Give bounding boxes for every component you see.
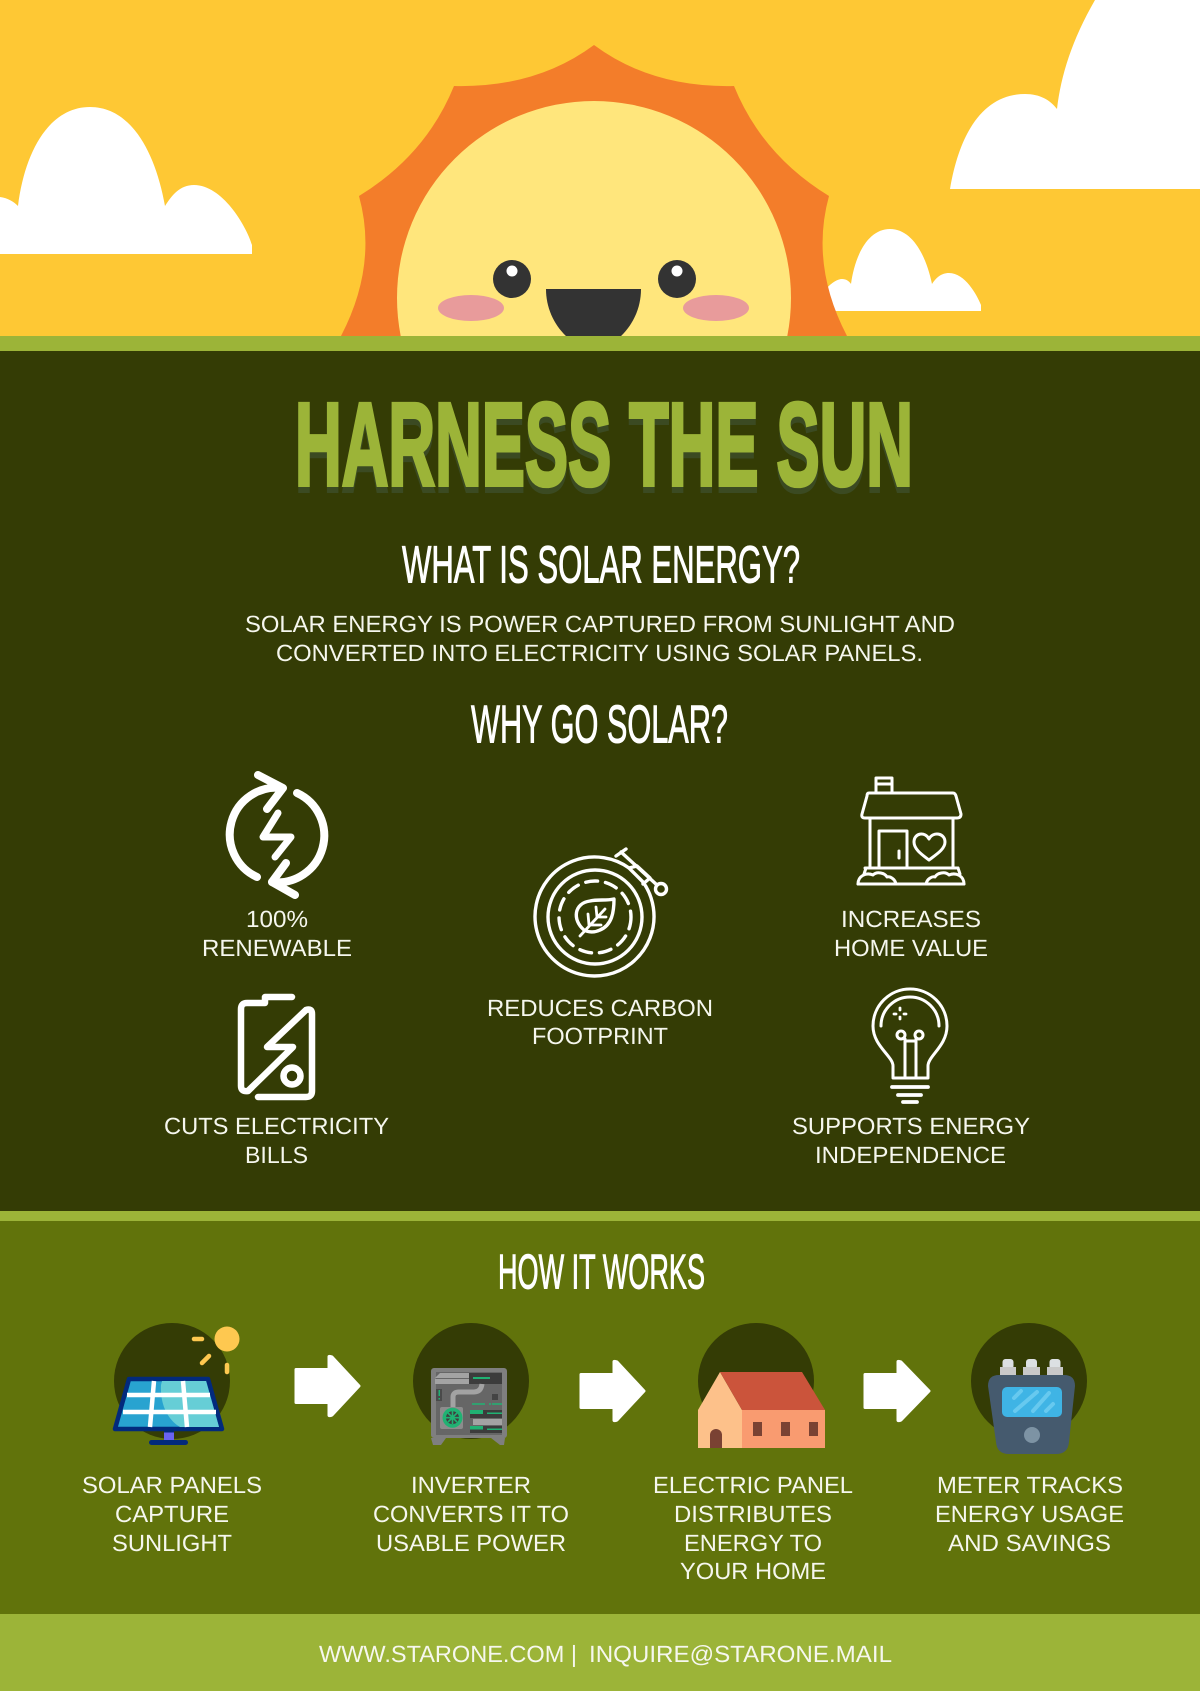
intro text [245,611,955,666]
footer contact line: INQUIRE@STARONE.MAIL [589,1641,892,1667]
label: YOUR HOME [680,1558,826,1584]
label: ELECTRIC PANEL [653,1472,853,1498]
label: CAPTURE [115,1501,229,1527]
label: CUTS ELECTRICITY [164,1113,389,1139]
divider band [0,1211,1200,1221]
label: SUNLIGHT [112,1530,232,1556]
dark panel background [0,351,1200,1211]
icon: house with heart [858,778,964,884]
heading: how it works: HOW IT WORKS [498,1246,705,1300]
benefit: reduces carbon footprint [487,849,713,1049]
label: INVERTER [411,1472,531,1498]
cloud: small right [825,229,981,311]
arrow 2 [581,1361,644,1421]
icon: battery bolt [241,997,312,1097]
sun face [397,101,791,336]
right cheek [683,295,749,321]
label: INCREASES [841,906,981,932]
footer background [0,1614,1200,1691]
label: 100% [246,906,308,932]
label [653,1472,853,1584]
label: BILLS [245,1142,308,1168]
icon: leaf rings [535,849,666,976]
label: DISTRIBUTES [674,1501,832,1527]
step 4: meter [935,1323,1124,1556]
right eye [658,260,696,298]
icon: meter [971,1323,1087,1454]
label: AND SAVINGS [948,1530,1111,1556]
label: INDEPENDENCE [815,1142,1006,1168]
label: FOOTPRINT [532,1023,668,1049]
label: RENEWABLE [202,935,352,961]
heading: why go solar: WHY GO SOLAR? [471,696,728,754]
label [373,1472,569,1556]
benefit: 100% renewable [202,775,352,961]
label [792,1113,1030,1168]
arrow 3 [865,1361,929,1421]
icon: renewable cycle bolt [230,775,324,895]
intro text: CONVERTED INTO ELECTRICITY USING SOLAR PANELS. [276,640,923,666]
footer contact line: WWW.STARONE.COM | [319,1641,577,1667]
icon: light bulb [873,989,947,1102]
left cheek [438,295,504,321]
icon: inverter [413,1323,529,1445]
label: HOME VALUE [834,935,988,961]
cloud: top right [950,0,1200,189]
step 2: inverter [373,1323,569,1556]
step 3: electric panel [653,1323,853,1584]
heading: what is solar energy: WHAT IS SOLAR ENERGY? [402,536,800,594]
icon: solar panel [114,1323,240,1445]
label [935,1472,1124,1556]
how it works background [0,1221,1200,1614]
title [295,379,913,517]
icon: house [698,1323,825,1448]
left eye [493,260,531,298]
grass band [0,336,1200,351]
label: CONVERTS IT TO [373,1501,569,1527]
mouth [546,289,641,337]
label [202,906,352,961]
benefit: increases home value [834,778,988,961]
step 1: solar panels [82,1323,262,1556]
arrow 1 [296,1356,359,1416]
label [487,995,713,1049]
cloud: left [0,107,252,254]
label: SOLAR PANELS [82,1472,262,1498]
label [834,906,988,961]
footer contact line [319,1641,892,1667]
label [82,1472,262,1556]
sun [341,45,847,336]
label [164,1113,389,1168]
label: USABLE POWER [376,1530,566,1556]
intro text: SOLAR ENERGY IS POWER CAPTURED FROM SUNLIGHT AND [245,611,955,637]
label: REDUCES CARBON [487,995,713,1021]
sun rays [341,45,847,336]
label: ENERGY TO [684,1530,822,1556]
benefit: cuts electricity bills [164,997,389,1168]
background: sky [0,0,1200,336]
label: SUPPORTS ENERGY [792,1113,1030,1139]
label: ENERGY USAGE [935,1501,1124,1527]
label: METER TRACKS [937,1472,1123,1498]
benefit: supports energy independence [792,989,1030,1168]
